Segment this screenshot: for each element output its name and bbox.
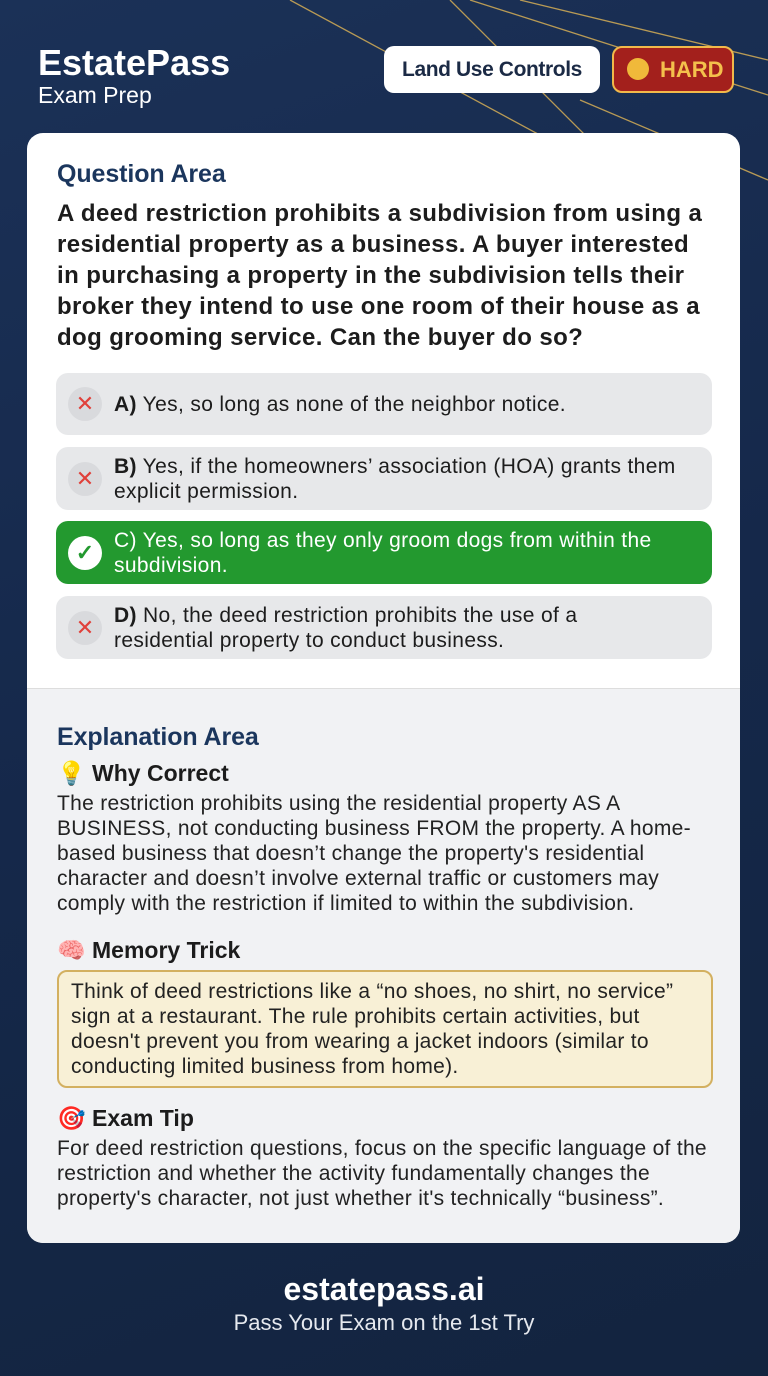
why correct: comply with the restriction if limited to within the subdivision.: [57, 892, 634, 915]
option C correct: C) Yes, so long as they only groom dogs from within the: [114, 528, 652, 552]
option B: explicit permission.: [114, 480, 298, 502]
memory trick: conducting limited business from home).: [71, 1055, 459, 1078]
footer: estatepass.ai: [283, 1271, 484, 1307]
option B: ✕: [76, 466, 94, 490]
footer: [234, 1271, 534, 1335]
option B: [56, 447, 712, 510]
exam tip: property's character, not just whether it's technically “business”.: [57, 1187, 664, 1210]
topic badge: [384, 46, 600, 93]
why correct: based business that doesn’t change the property's residential: [57, 842, 644, 865]
logo: [38, 42, 230, 108]
why correct: [57, 760, 691, 915]
option C correct: [56, 521, 712, 584]
explanation heading: Explanation Area: [57, 723, 259, 751]
option D: D) No, the deed restriction prohibits the use of a: [114, 604, 577, 626]
logo: Exam Prep: [38, 82, 152, 108]
footer: Pass Your Exam on the 1st Try: [234, 1310, 534, 1335]
exam tip: 🎯 Exam Tip: [57, 1105, 194, 1131]
option A: A) Yes, so long as none of the neighbor notice.: [114, 392, 566, 416]
why correct: The restriction prohibits using the residential property AS A: [57, 792, 620, 815]
option A: [56, 373, 712, 435]
option D: [56, 596, 712, 659]
question text: A deed restriction prohibits a subdivision from using a: [57, 200, 702, 227]
option D: residential property to conduct business.: [114, 628, 504, 652]
option C correct: ✓: [76, 540, 94, 564]
question text: [57, 200, 702, 351]
exam tip: For deed restriction questions, focus on the specific language of the: [57, 1137, 707, 1160]
option A: ✕: [76, 391, 94, 416]
difficulty badge: HARD: [660, 57, 724, 82]
why correct: 💡 Why Correct: [57, 760, 229, 786]
question text: broker they intend to use one room of their house as a: [57, 293, 700, 320]
background lines: [290, 0, 768, 181]
memory trick: [57, 937, 713, 1088]
topic badge: Land Use Controls: [402, 58, 582, 81]
difficulty badge: [612, 46, 734, 93]
memory trick: Think of deed restrictions like a “no shoes, no shirt, no service”: [71, 980, 673, 1003]
question heading: Question Area: [57, 160, 226, 188]
exam tip: restriction and whether the activity fundamentally changes the: [57, 1162, 650, 1185]
option C correct: subdivision.: [114, 554, 228, 576]
memory trick: doesn't prevent you from wearing a jacket indoors (similar to: [71, 1030, 649, 1053]
logo: EstatePass: [38, 42, 230, 83]
main card: [27, 133, 740, 1243]
memory trick: sign at a restaurant. The rule prohibits certain activities, but: [71, 1005, 640, 1028]
why correct: BUSINESS, not conducting business FROM the property. A home-: [57, 817, 691, 840]
memory trick: 🧠 Memory Trick: [57, 937, 240, 963]
question text: dog grooming service. Can the buyer do so?: [57, 324, 583, 351]
question text: in purchasing a property in the subdivision tells their: [57, 262, 684, 289]
exam tip: [57, 1105, 707, 1210]
option B: B) Yes, if the homeowners’ association (HOA) grants them: [114, 454, 676, 478]
option D: ✕: [76, 614, 94, 640]
question text: residential property as a business. A buyer interested: [57, 231, 689, 258]
why correct: character and doesn’t involve external traffic or customers may: [57, 867, 659, 890]
